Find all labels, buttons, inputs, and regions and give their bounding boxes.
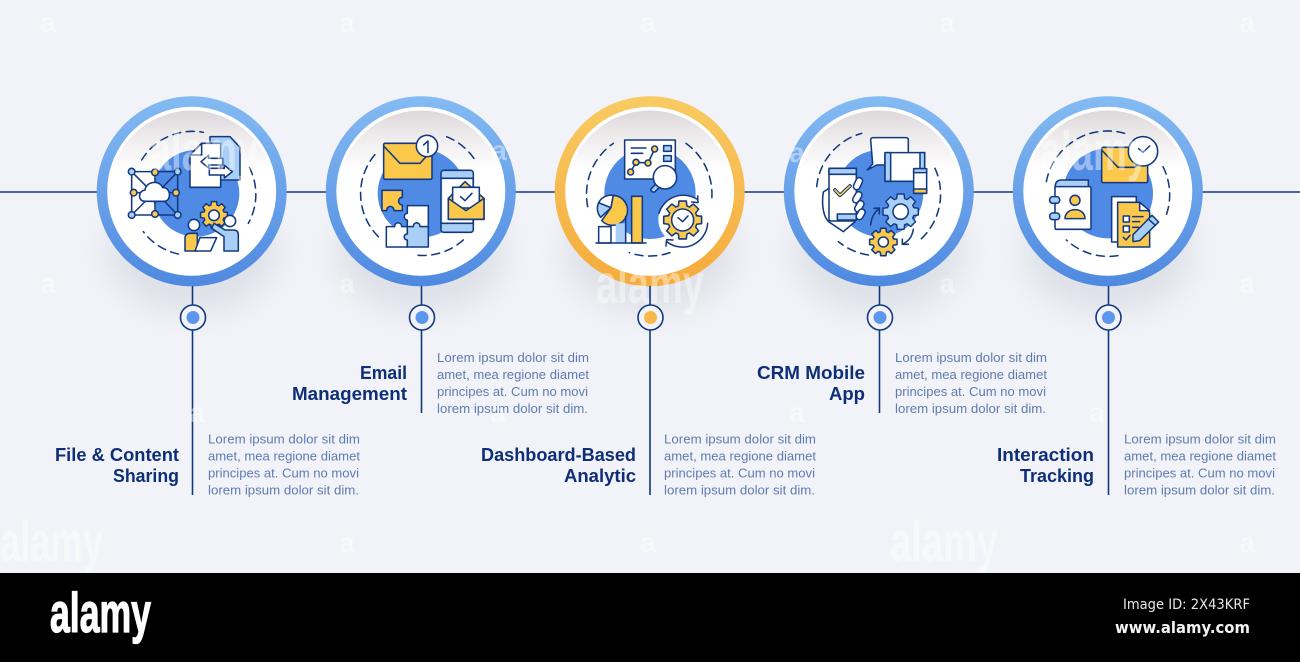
footer logo: alamy [50,581,151,644]
text block 4: lorem ipsum dolor sit dim. [895,401,1046,416]
step 3: dashboard-based analytic [481,96,816,498]
text block 2: principes at. Cum no movi [437,384,588,399]
watermarks: alamy [890,510,998,573]
heading 2: Email [360,362,407,383]
connector and node 3 [638,286,663,495]
step 2: email management [292,96,589,416]
heading 3: Analytic [564,465,636,486]
watermarks: a [640,7,656,38]
watermarks: a [490,397,506,428]
text block 3: amet, mea regione diamet [664,448,816,464]
heading 3: Dashboard-Based [481,444,636,465]
text block 5: Lorem ipsum dolor sit dim [1124,432,1276,446]
connector and node 2 [410,286,434,413]
text block 2: Lorem ipsum dolor sit dim [437,350,589,365]
image id: Image ID: 2X43KRF [1123,597,1250,613]
heading 1: Sharing [113,465,179,486]
website: www.alamy.com [1115,618,1250,637]
text block 1: lorem ipsum dolor sit dim. [208,482,359,498]
watermarks: a [40,7,56,38]
text block 3: Lorem ipsum dolor sit dim [664,432,816,446]
watermarks: a [339,268,355,299]
text block 3: principes at. Cum no movi [664,466,815,480]
footer bar [0,573,1300,662]
watermarks: a [189,397,205,428]
text block 3: lorem ipsum dolor sit dim. [664,482,815,498]
icon: address book, mail clock, checklist [1046,131,1170,256]
text block 5: principes at. Cum no movi [1124,466,1275,480]
watermarks: alamy [1040,119,1148,182]
heading 1: File & Content [55,444,179,465]
icon: mail, puzzle, phone [361,135,484,255]
watermarks: a [939,7,955,38]
text block 4: Lorem ipsum dolor sit dim [895,350,1047,365]
text block 2: amet, mea regione diamet [437,367,589,382]
connector and node 5 [1096,286,1121,495]
watermarks: alamy [0,510,103,573]
watermarks: alamy [596,252,704,315]
icon: dashboard, charts, clock gear [586,140,712,256]
circle badge 5 [1013,96,1203,312]
watermarks: a [339,527,355,558]
watermarks: a [1239,7,1255,38]
heading 4: App [829,383,865,404]
step 1: file and content sharing [55,96,360,498]
text block 2: lorem ipsum dolor sit dim. [437,401,588,416]
text block 4: principes at. Cum no movi [895,384,1046,399]
connector and node 4 [868,286,892,413]
heading 2: Management [292,383,407,404]
text block 4: amet, mea regione diamet [895,367,1047,382]
heading 5: Interaction [997,444,1094,465]
step 4: crm mobile app [757,96,1047,416]
heading 5: Tracking [1020,465,1094,486]
circle badge 2 [326,96,516,312]
text block 1: Lorem ipsum dolor sit dim [208,432,360,446]
icon: cloud network, documents, team gear [128,131,256,254]
connector and node 1 [180,286,206,495]
text block 1: amet, mea regione diamet [208,448,360,464]
watermarks: a [789,137,805,168]
text block 5: lorem ipsum dolor sit dim. [1124,482,1275,498]
watermarks: a [339,7,355,38]
circle badge 1 [97,96,287,312]
watermarks: a [1239,527,1255,558]
watermarks: a [789,397,805,428]
circle badge 3 [555,96,745,312]
icon: phone, devices, gears [817,133,941,256]
step 5: interaction tracking [997,96,1276,498]
watermarks: a [939,268,955,299]
watermarks: a [1089,397,1105,428]
circle badge 4 [784,96,974,312]
watermarks: alamy [150,119,258,182]
watermarks: a [1239,268,1255,299]
text block 5: amet, mea regione diamet [1124,448,1276,464]
watermarks: a [40,268,56,299]
heading 4: CRM Mobile [757,362,865,383]
horizontal timeline [0,191,1300,193]
watermarks: a [640,527,656,558]
watermarks: a [491,135,507,166]
text block 1: principes at. Cum no movi [208,466,359,480]
